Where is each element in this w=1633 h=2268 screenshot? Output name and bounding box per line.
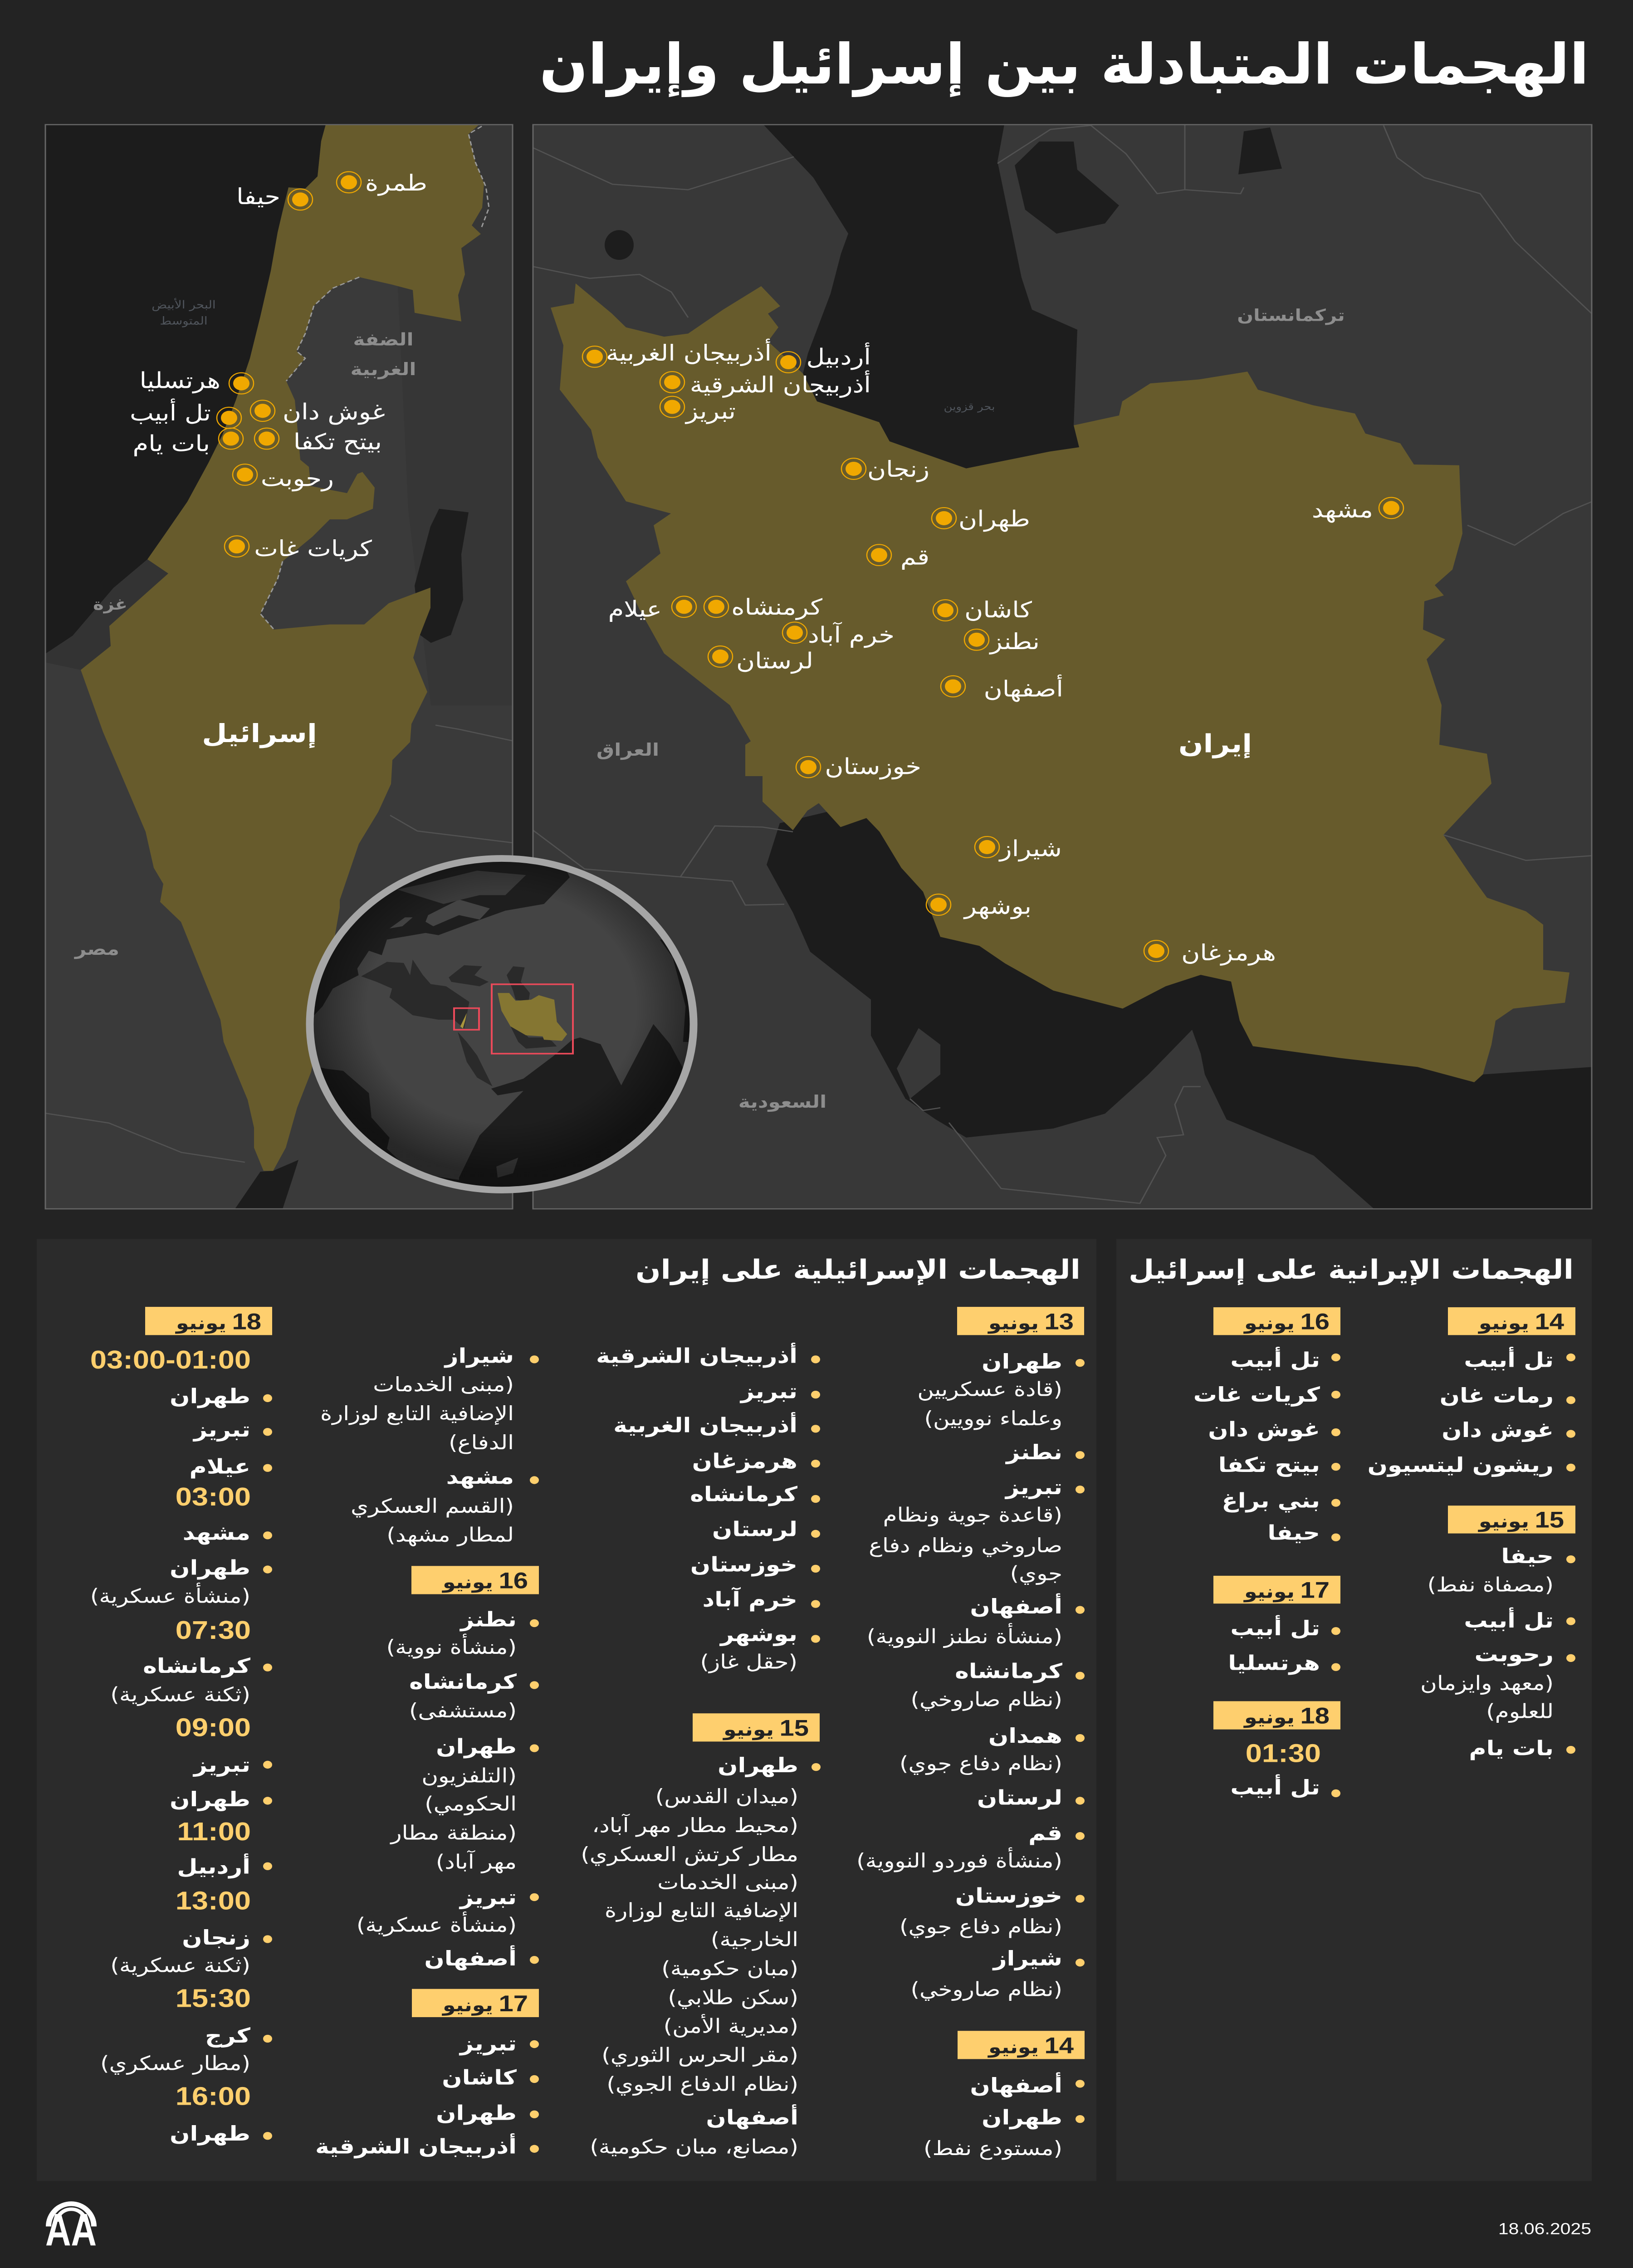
marker: East Azerbaijan: أذربيجان الشرقية (690, 371, 871, 398)
date stamp: 18.06.2025 (1498, 2220, 1591, 2238)
date block: 13 June: (منشأة فوردو النووية) (856, 1847, 1062, 1872)
marker: Bushehr (926, 894, 1032, 919)
date block: 18 June: (مطار عسكري) (100, 2053, 250, 2075)
Iran on globe (498, 993, 567, 1041)
marker: Mashhad: مشهد (1312, 497, 1373, 523)
date block: 15 June: (سكن طلابي) (668, 1987, 798, 2009)
date block: 18 June: طهران (170, 1385, 250, 1408)
date block: 16 June: يونيو (442, 1572, 493, 1593)
date block: 13 June: لرستان (977, 1786, 1062, 1810)
date block: 17 June: أذربيجان الشرقية (315, 2133, 517, 2159)
date block: 13 June: (منشأة نطنز النووية) (867, 1623, 1062, 1648)
Kara-Bogaz lake (1015, 142, 1119, 234)
date block: 13 June: (قاعدة جوية ونظام (883, 1504, 1062, 1527)
date block: 15 June: (مصفاة نفط) (1428, 1574, 1554, 1597)
label: Israel: إسرائيل (202, 719, 317, 748)
date block: 13 June continued: (حقل غاز) (700, 1651, 797, 1674)
date block: 15 June: (ميدان القدس) (655, 1785, 798, 1808)
date block: 16 June (357, 1566, 539, 1970)
marker: Natanz: نطنز (988, 629, 1040, 655)
date block: 16 June: (منطقة مطار (390, 1822, 517, 1845)
marker: Natanz (964, 629, 1040, 655)
date block: 18 June: 03:00 (176, 1482, 251, 1511)
date block: 15 June: (مبنى الخدمات (657, 1872, 798, 1894)
label: West Bank: الغربية (351, 359, 416, 379)
label: Iraq: العراق (596, 740, 659, 760)
heading: الهجمات الإيرانية على إسرائيل (1129, 1254, 1574, 1286)
marker: Lorestan (708, 646, 813, 674)
date block: 18 June: 18 (1300, 1703, 1330, 1729)
date block: 16 June: 16 (1300, 1309, 1330, 1334)
date block: 15 June: طهران (718, 1754, 798, 1777)
date block: 13 June: وعلماء نوويين) (924, 1408, 1062, 1430)
date block: 13 June continued: أذربيجان الشرقية (596, 1342, 797, 1368)
marker: Hormozgan: هرمزغان (1181, 940, 1276, 966)
date block: 18 June: يونيو (175, 1313, 226, 1334)
date block: 13 June: طهران (982, 1350, 1062, 1374)
date block: 15 June: يونيو (723, 1719, 774, 1740)
date block: 15 June: 15 (779, 1716, 809, 1741)
marker: Khorramabad: خرم آباد (808, 621, 895, 648)
marker: Isfahan (941, 675, 1063, 702)
date block: 13 June: كرمانشاه (955, 1660, 1063, 1683)
date block: 17 June: هرتسليا (1228, 1652, 1320, 1675)
date block: 16 June: يونيو (1243, 1313, 1295, 1334)
date block: 18 June (1213, 1701, 1340, 1799)
Mediterranean sea (45, 125, 326, 654)
date block: 18 June: (ثكنة عسكرية) (110, 1955, 250, 1977)
date block: 15 June: الإضافية التابع لوزارة (605, 1900, 798, 1922)
date block: 16 June: (مستشفى) (409, 1700, 517, 1722)
date block: 18 June: تل أبيب (1230, 1774, 1320, 1799)
date block: 15 June: (محيط مطار مهر آباد، (592, 1813, 798, 1837)
marker: Khuzestan: خوزستان (825, 754, 921, 780)
date block: 18 June: مشهد (183, 1521, 250, 1545)
marker: Haifa: حيفا (236, 184, 280, 210)
date block: 13 June: تبريز (1004, 1476, 1062, 1499)
date block: 18 June: كرمانشاه (143, 1655, 251, 1678)
Lake Van (605, 230, 634, 260)
date block: 15 June: للعلوم) (1486, 1701, 1554, 1723)
date block: 13 June: شيراز (992, 1947, 1062, 1970)
date block: 18 June: عيلام (190, 1455, 250, 1478)
date block: 17 June: يونيو (442, 1995, 493, 2016)
date block: 13 June continued: بوشهر (719, 1623, 797, 1646)
date block: 15 June: (مبان حكومية) (661, 1958, 798, 1980)
date block: 14 June: 14 (1535, 1309, 1564, 1334)
date block: 16 June: بني براغ (1222, 1489, 1320, 1513)
label: West Bank: الضفة (353, 329, 414, 350)
date block: 15 June (581, 1713, 821, 2159)
marker: Kermanshah: كرمنشاه (731, 595, 822, 620)
locator box Iran (492, 984, 573, 1054)
date block: 18 June: زنجان (182, 1926, 250, 1950)
date block: 15 June continued: شيراز (443, 1344, 514, 1368)
date block: 14 June: رمات غان (1440, 1384, 1554, 1408)
date block: 15 June: حيفا (1501, 1545, 1554, 1568)
logo: AA (45, 2204, 97, 2255)
date block: 13 June: همدان (988, 1724, 1062, 1748)
heading: الهجمات الإسرائيلية على إيران (636, 1254, 1081, 1286)
marker: Shiraz: شيراز (998, 836, 1062, 861)
date block: 16 June: (منشأة نووية) (386, 1633, 517, 1659)
date block: 17 June (1213, 1576, 1340, 1675)
marker: Petah Tikva: بيتح تكفا (293, 429, 382, 455)
date block: 15 June: 15 (1535, 1507, 1564, 1533)
marker: Ardabil (776, 343, 871, 373)
date block: 18 June: 16:00 (176, 2082, 251, 2111)
marker: Bushehr: بوشهر (963, 894, 1032, 919)
marker: Kiryat Gat: كريات غات (254, 536, 372, 562)
date block: 16 June: كرمانشاه (409, 1670, 517, 1694)
date block: 13 June continued: خرم آباد (702, 1587, 797, 1611)
date block: 18 June: 11:00 (177, 1817, 251, 1846)
marker: Zanjan: زنجان (867, 456, 929, 482)
date block: 15 June: (معهد وايزمان (1420, 1672, 1554, 1695)
date block: 18 June: 09:00 (176, 1713, 251, 1741)
date block: 18 June: أردبيل (177, 1853, 250, 1879)
Dead Sea (415, 509, 469, 643)
date block: 13 June: (نظام صاروخي) (910, 1689, 1062, 1711)
date block: 15 June continued: (مبنى الخدمات (373, 1374, 514, 1396)
date block: 14 June: غوش دان (1442, 1418, 1554, 1442)
date block: 13 June continued: خوزستان (690, 1553, 797, 1576)
date block: 14 June: تل أبيب (1464, 1346, 1554, 1372)
date block: 14 June: يونيو (1478, 1313, 1529, 1334)
date block: 18 June: 18 (232, 1309, 261, 1334)
date block: 15 June: (مصانع، مبان حكومية) (590, 2136, 798, 2159)
date block: 13 June: (نظام دفاع جوي) (900, 1916, 1062, 1938)
date block: 15 June continued: الإضافية التابع لوزارة (320, 1403, 514, 1425)
marker: Kashan: كاشان (964, 597, 1032, 623)
date block: 14 June: ريشون ليتسيون (1368, 1453, 1554, 1477)
marker: West Azerbaijan: أذربيجان الغربية (606, 339, 772, 366)
marker: Ilam (608, 596, 696, 622)
date block: 16 June: (التلفزيون (421, 1765, 517, 1787)
date block: 16 June: بيتح تكفا (1218, 1453, 1320, 1477)
date block: 18 June: طهران (170, 1788, 250, 1811)
date block: 16 June: 16 (499, 1568, 528, 1593)
Persian Gulf and Gulf of Oman (767, 804, 1592, 1209)
date block: 15 June: الخارجية) (711, 1929, 798, 1951)
label: Saudi Arabia: السعودية (738, 1092, 826, 1112)
label: sea: البحر الأبيض (152, 298, 216, 312)
date block: 13 June: قم (1028, 1822, 1062, 1845)
label: Egypt: مصر (74, 939, 119, 959)
Caspian Sea (763, 125, 1079, 469)
date block: 16 June: حيفا (1267, 1521, 1320, 1545)
date block: 14 June: 14 (1044, 2033, 1074, 2058)
date block: 17 June: 17 (1300, 1578, 1330, 1603)
label: sea (152, 298, 216, 327)
date block: 16 June (1193, 1307, 1340, 1545)
date block: 13 June: (نظام صاروخي) (910, 1978, 1062, 2001)
marker: Qom: قم (900, 544, 929, 570)
date block: 13 June continued: لرستان (712, 1518, 797, 1541)
panel: Iran map (533, 125, 1592, 1209)
marker: Qom (867, 544, 929, 570)
marker: Ardabil: أردبيل (807, 343, 871, 370)
date block: 16 June: تبريز (459, 1886, 517, 1909)
date block: 16 June: الحكومي) (425, 1793, 517, 1816)
date block: 18 June: (منشأة عسكرية) (90, 1583, 250, 1608)
date block: 16 June: تل أبيب (1230, 1346, 1320, 1372)
marker: Haifa (236, 184, 313, 210)
date block: 18 June: (ثكنة عسكرية) (110, 1684, 250, 1706)
label: Iran: إيران (1178, 729, 1252, 758)
Gulf of Aqaba (235, 1160, 298, 1209)
date block: 13 June continued: أذربيجان الغربية (613, 1412, 797, 1437)
date block: 17 June: يونيو (1243, 1581, 1295, 1602)
date block: 17 June (315, 1989, 539, 2159)
marker: Bat Yam: بات يام (133, 431, 210, 457)
marker: Rehovot: رحوبت (261, 466, 334, 492)
Aral lake (1238, 127, 1282, 175)
date block: 18 June: 13:00 (176, 1886, 251, 1915)
date block: 15 June: مطار كرتش العسكري) (581, 1843, 798, 1866)
marker: Rehovot (233, 464, 334, 492)
date block: 18 June: تبريز (192, 1753, 250, 1777)
marker: Herzliya: هرتسليا (140, 368, 220, 394)
date block: 15 June continued: الدفاع) (449, 1432, 514, 1454)
date block: 17 June: كاشان (442, 2066, 517, 2090)
date block: 15 June: (مديرية الأمن) (664, 2014, 798, 2038)
date block: 17 June: تل أبيب (1230, 1615, 1320, 1640)
date block: 14 June (1368, 1307, 1575, 1477)
date block: 15 June: (نظام الدفاع الجوي) (606, 2073, 798, 2096)
marker: Tel Aviv: تل أبيب (130, 399, 211, 426)
date block: 15 June continued: مشهد (446, 1465, 514, 1489)
date block: 15 June: بات يام (1469, 1737, 1554, 1760)
marker: Tabriz (660, 396, 736, 424)
date block: 14 June (924, 2031, 1085, 2160)
marker: Lorestan: لرستان (736, 648, 813, 674)
date block: 18 June: كرج (205, 2024, 251, 2048)
date block: 13 June: خوزستان (955, 1884, 1062, 1908)
date block: 16 June: غوش دان (1208, 1418, 1320, 1441)
date block: 13 June continued: تبريز (739, 1380, 797, 1403)
date block: 18 June: يونيو (1243, 1707, 1295, 1728)
date block: 13 June: يونيو (988, 1313, 1039, 1334)
date block: 16 June: نطنز (459, 1608, 517, 1631)
marker: Petah Tikva (254, 428, 382, 455)
date block: 15 June continued (320, 1344, 539, 1547)
date block: 18 June: 01:30 (1246, 1739, 1321, 1767)
date block: 15 June (1420, 1505, 1575, 1760)
Iran territory (551, 284, 1569, 1082)
date block: 17 June: 17 (499, 1991, 528, 2016)
marker: Herzliya (140, 368, 254, 394)
marker: Isfahan: أصفهان (984, 675, 1063, 702)
marker: Tabriz: تبريز (684, 399, 736, 424)
date block: 13 June: (قادة عسكريين (917, 1378, 1062, 1401)
panel: Israel map (45, 125, 513, 1209)
date block: 18 June: تبريز (192, 1418, 250, 1442)
marker: Kashan (933, 597, 1032, 623)
date block: 13 June continued (596, 1342, 820, 1674)
label: sea: المتوسط (160, 315, 208, 327)
locator box Israel (454, 1008, 479, 1030)
marker: Mashhad (1312, 497, 1403, 523)
label: West Bank (351, 329, 416, 379)
date block: 17 June: طهران (436, 2102, 517, 2125)
date block: 13 June continued: كرمانشاه (690, 1483, 798, 1506)
date block: 15 June: تل أبيب (1464, 1607, 1554, 1633)
date block: 15 June continued: (القسم العسكري (351, 1495, 514, 1518)
marker: Gush Dan: غوش دان (283, 399, 385, 425)
Israel territory (81, 125, 484, 1171)
date block: 16 June: (منشأة عسكرية) (357, 1911, 517, 1937)
date block: 13 June: (نظام دفاع جوي) (900, 1753, 1062, 1775)
date block: 15 June continued: لمطار مشهد) (386, 1524, 514, 1547)
date block: 15 June: رحوبت (1474, 1643, 1554, 1666)
date block: 13 June: صاروخي ونظام دفاع (869, 1535, 1062, 1557)
date block: 13 June continued: هرمزغان (692, 1450, 797, 1473)
date block: 16 June: كريات غات (1193, 1383, 1320, 1407)
date block: 15 June: (مقر الحرس الثوري) (601, 2044, 798, 2067)
date block: 18 June: 07:30 (176, 1616, 251, 1644)
date block: 15 June: أصفهان (706, 2104, 798, 2130)
marker: Bat Yam (133, 428, 243, 457)
Israel on globe (460, 1013, 467, 1029)
date block: 13 June: أصفهان (970, 1593, 1062, 1618)
date block: 13 June: 13 (1044, 1309, 1074, 1334)
date block: 14 June: طهران (982, 2106, 1062, 2130)
logo: AA: AA (45, 2204, 97, 2255)
date block: 18 June: طهران (170, 1556, 250, 1579)
date block: 15 June: يونيو (1478, 1511, 1529, 1532)
date block: 18 June: 03:00-01:00 (90, 1345, 251, 1374)
date block: 14 June: يونيو (988, 2037, 1039, 2058)
marker: Ilam: عيلام (608, 596, 662, 622)
date block: 16 June: مهر آباد) (436, 1850, 517, 1874)
date block: 14 June: أصفهان (970, 2072, 1062, 2097)
globe inset (299, 850, 703, 1199)
marker: Tehran: طهران (958, 506, 1030, 532)
date block: 18 June (90, 1307, 272, 2146)
date block: 13 June: جوي) (1010, 1563, 1062, 1585)
date block: 17 June: تبريز (459, 2032, 517, 2055)
date block: 16 June: طهران (436, 1735, 517, 1758)
date block: 13 June: نطنز (1005, 1441, 1062, 1464)
marker: Tel Aviv (130, 399, 241, 429)
label: Caspian Sea: بحر قزوين (944, 401, 995, 412)
panel: Israeli attacks on Iran (37, 1239, 1096, 2181)
date block: 16 June: أصفهان (424, 1945, 517, 1970)
date block: 18 June: طهران (170, 2122, 250, 2146)
date block: 13 June (856, 1307, 1085, 2001)
panel: Iranian attacks on Israel (1116, 1239, 1592, 2181)
date block: 14 June: (مستودع نفط) (924, 2137, 1062, 2160)
label: Gaza: غزة (93, 595, 127, 613)
marker: Tamra (337, 171, 427, 196)
label: Turkmenistan: تركمانستان (1237, 306, 1345, 325)
marker: Tamra: طمرة (365, 171, 427, 196)
date block: 18 June: 15:30 (176, 1984, 251, 2012)
